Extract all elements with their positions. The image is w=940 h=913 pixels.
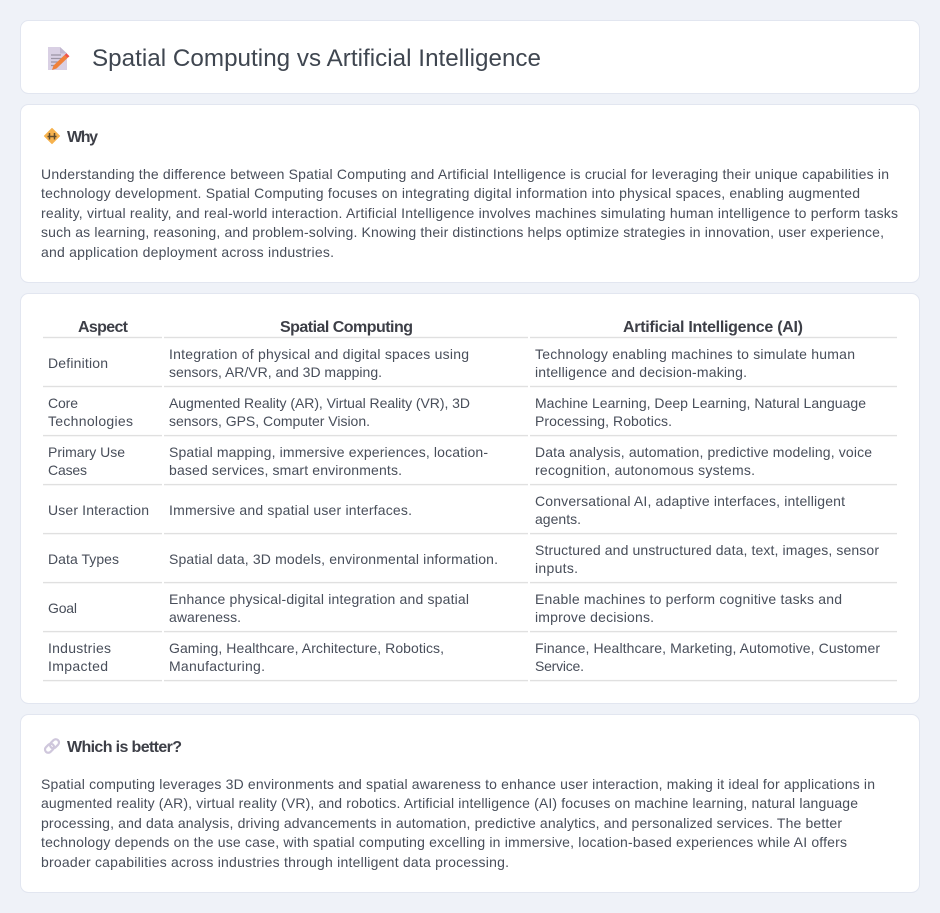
row: definition: Technology enabling machines to simulate human [535, 346, 855, 362]
row: definition: intelligence and decision-making. [535, 364, 747, 380]
row: user interaction: Immersive and spatial user interfaces. [169, 502, 412, 518]
text block: verdict: augmented reality (AR), virtual reality (VR), and robotics. Artificial intelligence (AI) focuses on machine learning, natural language [41, 795, 858, 811]
table header: Aspect [78, 319, 129, 336]
row: primary use cases: Cases [48, 462, 87, 478]
row: goal: improve decisions. [535, 609, 654, 625]
row: data types: inputs. [535, 560, 578, 576]
row: user interaction [43, 493, 897, 534]
text block: verdict: technology depends on the use case, with spatial computing excelling in immersive, location-based experiences while AI offers [41, 834, 847, 850]
row: primary use cases: Primary Use [48, 444, 125, 460]
row: core technologies: sensors, GPS, Computer Vision. [169, 413, 370, 429]
row: core technologies [43, 395, 897, 436]
row: goal: Enhance physical-digital integration and spatial [169, 591, 469, 607]
row: industries impacted: Service. [535, 658, 584, 674]
text block: why explanation: reality, virtual reality, and real-world interaction. Artificial Intelligence involves machines simulating human intelligence to perform tasks [41, 205, 898, 221]
text block: verdict: Spatial computing leverages 3D environments and spatial awareness to enhance user interaction, making it ideal for applications in [41, 776, 875, 792]
row: industries impacted: Manufacturing. [169, 658, 265, 674]
text block: why explanation: technology development. Spatial Computing focuses on integrating digital information into physical spaces, enabling augmented [41, 185, 860, 201]
table header: Spatial Computing [280, 319, 413, 336]
row: data types: Spatial data, 3D models, environmental information. [169, 551, 498, 567]
row: definition: Integration of physical and digital spaces using [169, 346, 469, 362]
heading: why: Why [67, 129, 98, 146]
panel: which is better [20, 714, 920, 892]
row: definition: sensors, AR/VR, and 3D mapping. [169, 364, 382, 380]
row: industries impacted [43, 640, 897, 681]
row: industries impacted: Finance, Healthcare, Marketing, Automotive, Customer [535, 640, 880, 656]
row: goal: awareness. [169, 609, 241, 625]
icon: warning diamond [44, 128, 60, 144]
text block: why explanation: such as learning, reasoning, and problem-solving. Knowing their distinctions helps optimize strategies in innovation, user experience, [41, 224, 884, 240]
text block: verdict: broader capabilities across industries through intelligent data processing. [41, 854, 509, 870]
heading: which is better: Which is better? [67, 739, 182, 756]
icon: document with pencil [48, 47, 70, 70]
row: core technologies: Technologies [48, 413, 133, 429]
row: goal [43, 591, 897, 632]
row: goal: Goal [48, 600, 77, 616]
row: goal: Enable machines to perform cognitive tasks and [535, 591, 842, 607]
text block: why explanation: and application deployment across industries. [41, 244, 334, 260]
row: industries impacted: Industries [48, 640, 111, 656]
row: user interaction: agents. [535, 511, 581, 527]
text block: verdict: processing, and data analysis, driving advancements in automation, predictive analytics, and personalized services. The better [41, 815, 842, 831]
row: core technologies: Core [48, 395, 78, 411]
row: core technologies: Augmented Reality (AR), Virtual Reality (VR), 3D [169, 395, 470, 411]
text block: why explanation: Understanding the difference between Spatial Computing and Artificial Intelligence is crucial for leveraging their unique capabilities in [41, 166, 889, 182]
row: primary use cases: Data analysis, automation, predictive modeling, voice [535, 444, 872, 460]
row: core technologies: Processing, Robotics. [535, 413, 672, 429]
text block: why explanation [41, 166, 898, 260]
row: definition [43, 346, 897, 387]
row: core technologies: Machine Learning, Deep Learning, Natural Language [535, 395, 866, 411]
icon: chain link [44, 738, 60, 754]
row: data types: Structured and unstructured data, text, images, sensor [535, 542, 879, 558]
title: Spatial Computing vs Artificial Intelligence [92, 45, 541, 72]
table header [43, 319, 897, 338]
row: definition: Definition [48, 355, 108, 371]
panel: title header [20, 20, 920, 94]
row: primary use cases: Spatial mapping, immersive experiences, location- [169, 444, 488, 460]
row: primary use cases: based services, smart environments. [169, 462, 402, 478]
text block: verdict [41, 776, 875, 870]
row: industries impacted: Impacted [48, 658, 108, 674]
table header: Artificial Intelligence (AI) [623, 319, 803, 336]
row: primary use cases: recognition, autonomous systems. [535, 462, 755, 478]
row: primary use cases [43, 444, 897, 485]
panel: comparison table [20, 294, 920, 704]
row: user interaction: Conversational AI, adaptive interfaces, intelligent [535, 493, 845, 509]
panel: why [20, 104, 920, 282]
row: data types: Data Types [48, 551, 119, 567]
row: data types [43, 542, 897, 583]
row: user interaction: User Interaction [48, 502, 149, 518]
row: industries impacted: Gaming, Healthcare, Architecture, Robotics, [169, 640, 444, 656]
